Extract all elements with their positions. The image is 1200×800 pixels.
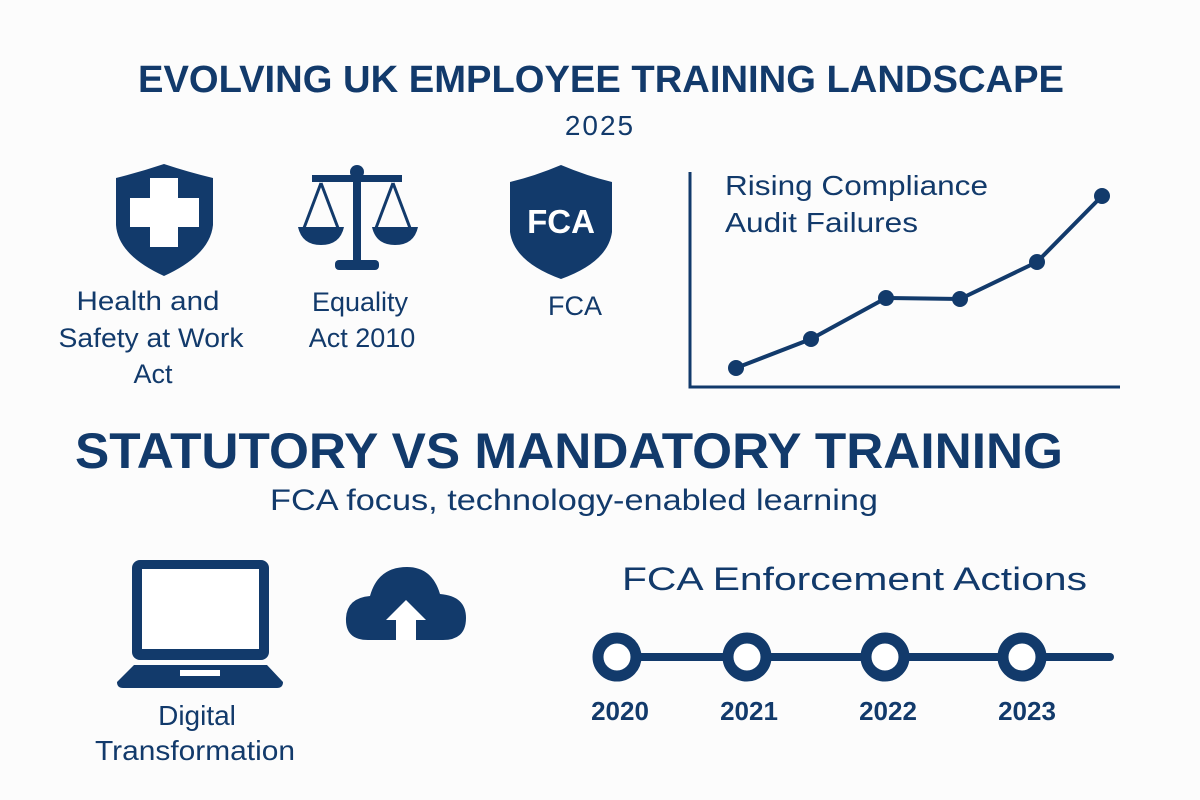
label: FCA: FCA [548, 291, 602, 321]
heading: statutory vs mandatory: STATUTORY VS MANDATORY TRAINING [75, 423, 1063, 479]
chart: rising compliance audit failures [690, 170, 1120, 387]
label: digital transformation [95, 700, 295, 766]
icon: FCA shield [510, 165, 612, 279]
timeline [591, 638, 1110, 726]
chart: rising compliance audit failures: Audit Failures [725, 207, 918, 238]
label: health and safety [58, 286, 244, 389]
heading: FCA enforcement actions: FCA Enforcement Actions [622, 561, 1087, 597]
timeline: 2021 [720, 696, 778, 726]
icon: scales [298, 165, 418, 270]
label: health and safety: Act [133, 359, 173, 389]
icon: cloud upload [346, 567, 466, 640]
subheading: FCA focus, technology-enabled learning [270, 484, 878, 517]
label: digital transformation: Digital [158, 700, 236, 731]
timeline: 2020 [591, 696, 649, 726]
timeline: 2023 [998, 696, 1056, 726]
label: digital transformation: Transformation [95, 735, 295, 766]
icon: laptop [117, 560, 283, 688]
icon: health shield [116, 164, 213, 276]
label: health and safety: Safety at Work [58, 323, 244, 353]
label: equality act: Equality [312, 287, 409, 317]
title: EVOLVING UK EMPLOYEE TRAINING LANDSCAPE [138, 59, 1064, 101]
label: equality act: Act 2010 [309, 323, 415, 353]
label: health and safety: Health and [76, 286, 220, 316]
chart: rising compliance audit failures: Rising Compliance [725, 170, 988, 201]
subtitle year: 2025 [565, 110, 635, 141]
icon: FCA shield: FCA [527, 203, 595, 240]
timeline: 2022 [859, 696, 917, 726]
label: equality act [309, 287, 415, 353]
